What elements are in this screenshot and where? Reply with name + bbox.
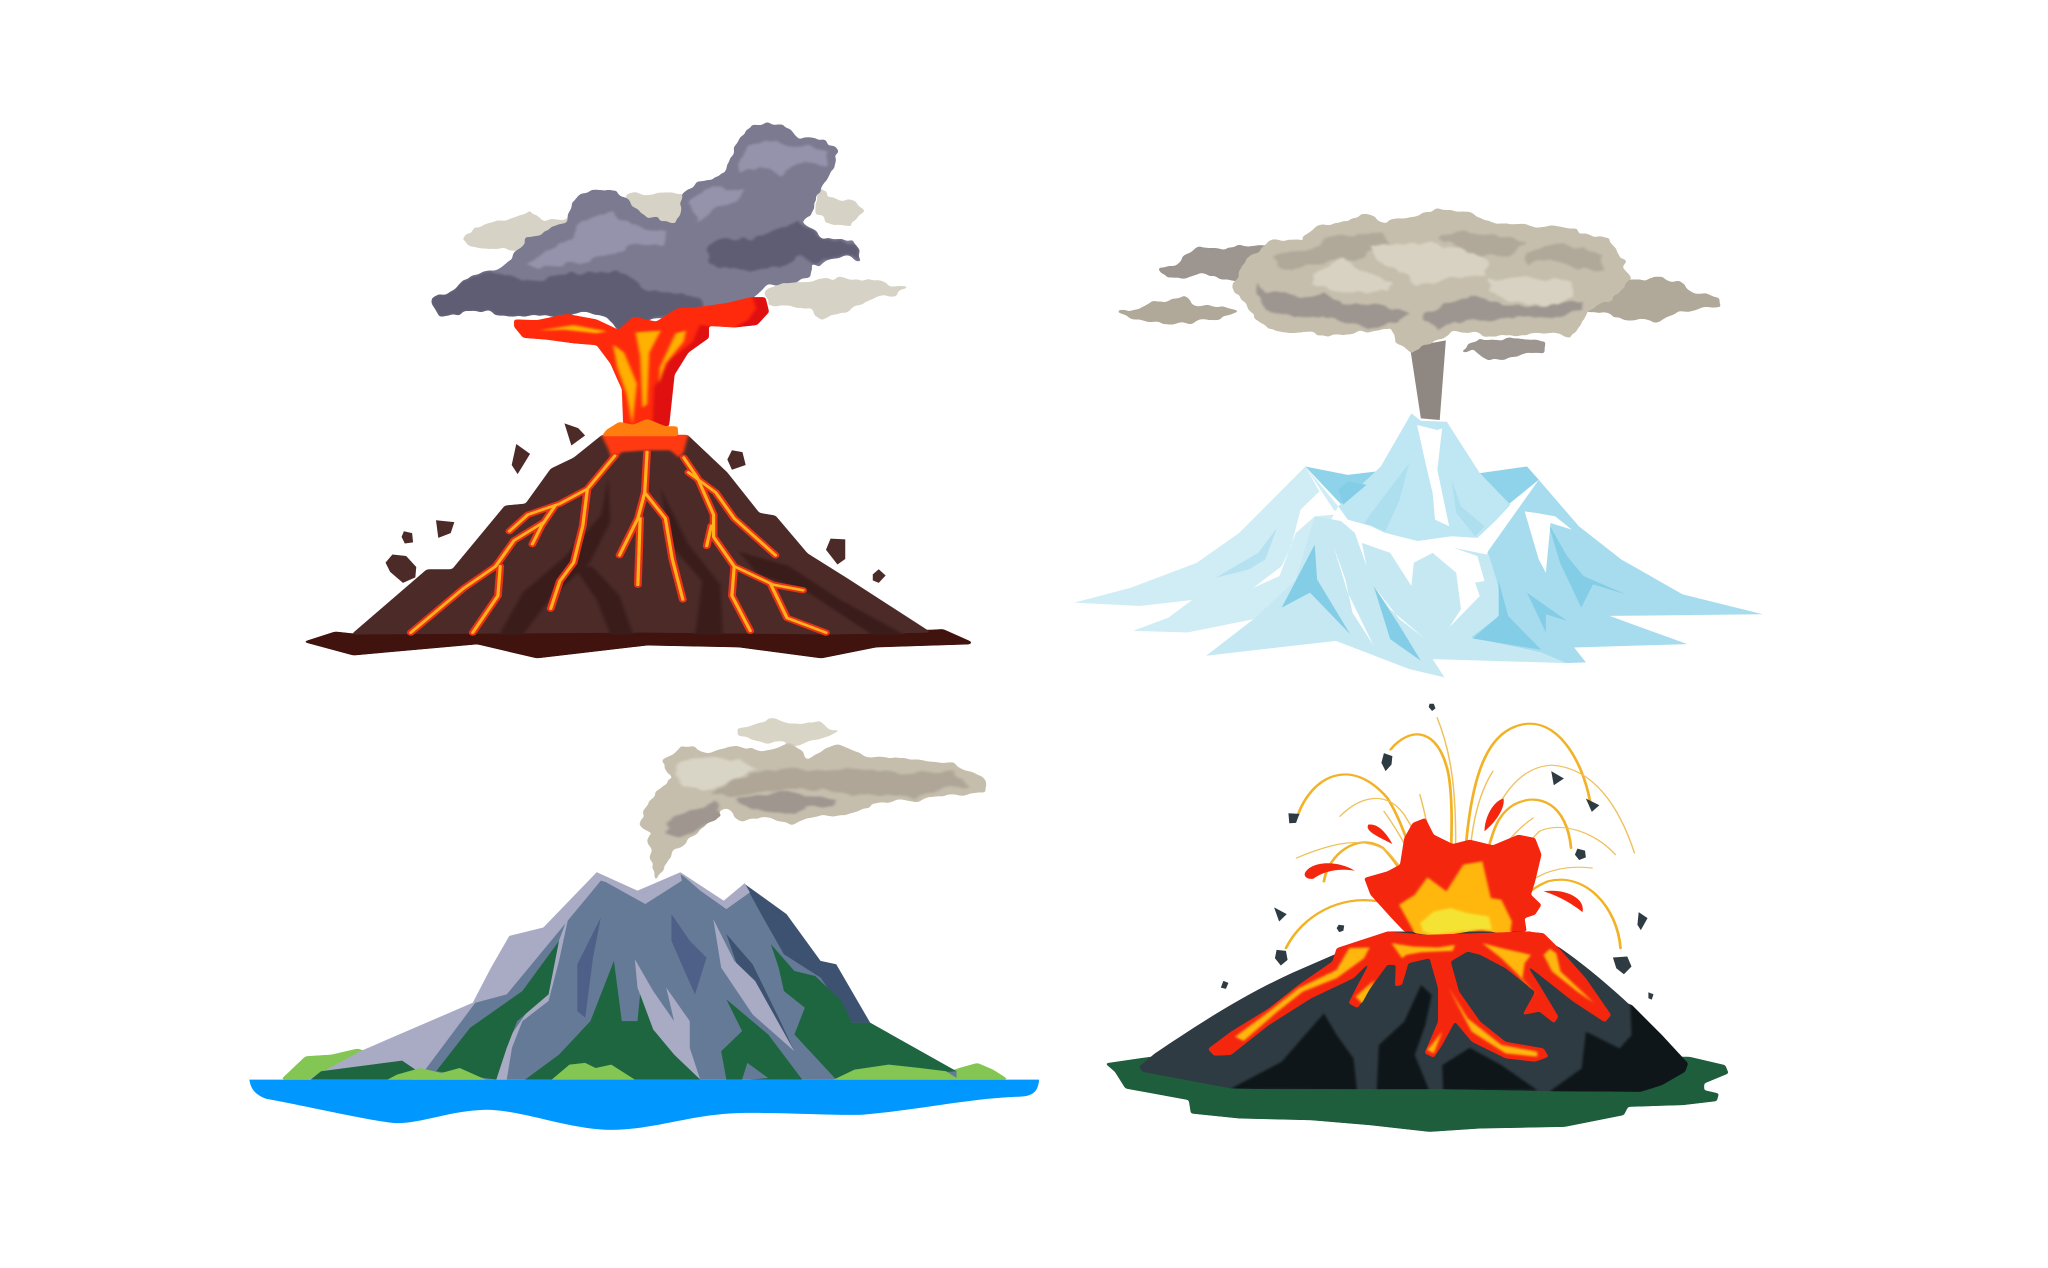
foreground green bushes: [387, 1063, 959, 1080]
beige background clouds: [464, 190, 905, 318]
lava droplets: [1305, 799, 1583, 912]
ash column: [1410, 340, 1446, 420]
thin sparks: [1296, 718, 1634, 898]
ground: [1105, 1057, 1729, 1132]
side clouds: [1121, 245, 1720, 360]
light smoke plume: [640, 718, 985, 877]
mountain: [308, 872, 957, 1080]
water: [249, 1080, 1039, 1130]
grey smoke cloud: [435, 124, 858, 327]
volcano ground: [303, 629, 972, 658]
dark cone: [1139, 931, 1688, 1092]
bright green side hills: [281, 1049, 1009, 1080]
main ash cloud: [1235, 209, 1628, 350]
lava fountain: [514, 297, 769, 426]
flying rocks: [386, 423, 886, 583]
lava streams: [411, 452, 826, 633]
volcano: explosive lava burst on dark cone: [1105, 704, 1729, 1132]
volcano: ice-covered with ash cloud: [1074, 209, 1763, 677]
volcano: erupting lava column with dark smoke: [303, 124, 972, 658]
crater lava bubble: [603, 420, 677, 435]
mountain body: [351, 435, 931, 634]
lava flows on cone: [1208, 931, 1611, 1062]
lava burst: [1364, 818, 1542, 936]
flying rocks: [1221, 704, 1653, 1000]
volcano: island with green slopes and light smoke: [249, 718, 1039, 1130]
ice mountain: [1074, 413, 1763, 677]
lava sparks behind burst: [1286, 724, 1621, 948]
